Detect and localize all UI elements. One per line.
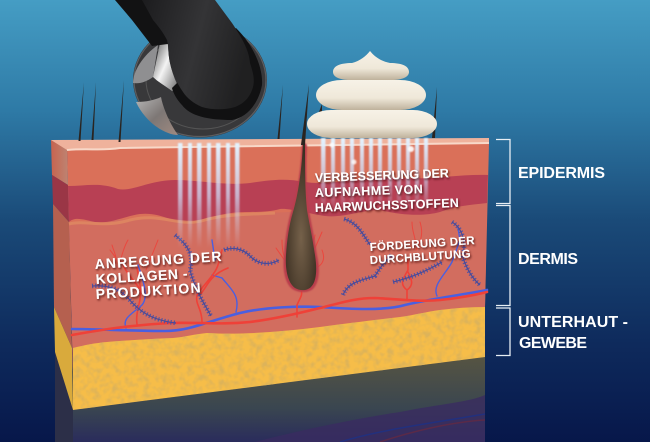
annotation: blood circulation: FÖRDERUNG DER: [369, 234, 476, 254]
skin block: [51, 138, 489, 410]
epidermis and dermis: [67, 143, 489, 372]
annotation: collagen production: [94, 248, 222, 302]
reflection below skin block: [55, 352, 485, 442]
silver rim: [133, 45, 158, 83]
light beams under foam: [321, 138, 428, 210]
fat layer: [73, 307, 485, 410]
hair follicle: [283, 140, 319, 292]
top surface: [51, 138, 489, 150]
bracket: dermis: [496, 206, 510, 306]
annotation: blood circulation: [369, 234, 476, 267]
annotation: hair product absorption: VERBESSERUNG DER: [315, 166, 449, 185]
label: subcutis: UNTERHAUT -: [518, 314, 628, 331]
collagen fibres: [92, 219, 480, 323]
label: subcutis: GEWEBE: [519, 335, 587, 352]
skin surface line: [67, 143, 489, 150]
hairs: [78, 80, 437, 145]
left side face: [51, 140, 73, 410]
annotation: collagen production: ANREGUNG DER: [94, 248, 222, 272]
handle: [142, 0, 254, 109]
label: dermis: DERMIS: [518, 251, 578, 268]
annotation: blood circulation: DURCHBLUTUNG: [369, 248, 471, 267]
annotation: hair product absorption: AUFNAHME VON: [315, 182, 423, 200]
blue vessels: [72, 228, 487, 331]
annotation: collagen production: PRODUKTION: [95, 279, 201, 302]
annotation: collagen production: KOLLAGEN -: [95, 265, 188, 287]
roller disk: [133, 22, 267, 138]
annotation: hair product absorption: [315, 166, 459, 215]
bracket: epidermis: [496, 140, 510, 204]
annotation: hair product absorption: HAARWUCHSSTOFFEN: [315, 196, 459, 215]
dark inner hub: [172, 28, 262, 120]
dark red dermal band: [68, 175, 488, 222]
blood vessels: [72, 222, 487, 335]
arm: [115, 0, 172, 46]
red vessels: [72, 222, 487, 335]
light beams under roller: [178, 143, 240, 248]
bracket: subcutis: [496, 308, 510, 356]
cream foam: [307, 51, 437, 138]
microneedle roller device: [115, 0, 267, 138]
label: epidermis: EPIDERMIS: [518, 165, 605, 182]
